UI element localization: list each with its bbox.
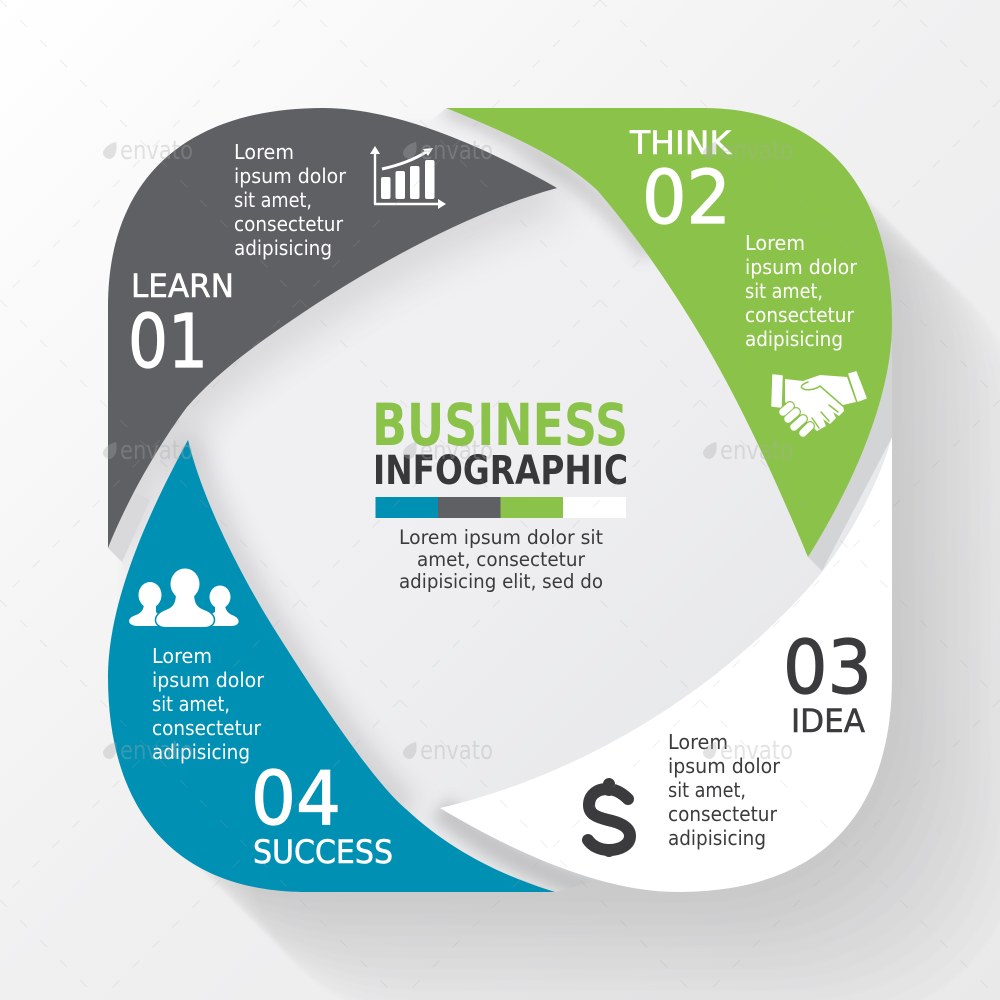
body text: think: consectetur [745, 303, 855, 327]
panel 02: think [446, 108, 892, 557]
envato watermarks: envato [420, 736, 493, 766]
panel 04: success [108, 440, 555, 892]
envato watermarks: envato [120, 136, 193, 166]
panel shadows [108, 108, 650, 900]
long shadow [119, 119, 1000, 1000]
body text: success: ipsum dolor [152, 668, 265, 692]
center body text: amet, consectetur [417, 548, 586, 571]
central backdrop [108, 108, 892, 892]
body text: success [152, 644, 265, 764]
body text: idea [668, 730, 781, 850]
envato watermarks: envato [720, 136, 793, 166]
center body text: Lorem ipsum dolor sit [399, 526, 603, 549]
cast shadow band: dark tip [108, 490, 150, 562]
body text: learn [234, 140, 347, 260]
body text: think [745, 231, 858, 351]
heading: infographic: INFOGRAPHIC [373, 448, 628, 494]
body text: learn: sit amet, [234, 188, 312, 212]
center body text [399, 526, 603, 593]
icon: dollar sign [588, 784, 630, 851]
body text: idea: sit amet, [668, 778, 746, 802]
icon: people [129, 568, 239, 627]
heading: business: BUSINESS [372, 392, 628, 459]
body text: idea: Lorem [668, 730, 728, 754]
step label: learn: LEARN [131, 267, 234, 305]
center title block [372, 392, 628, 593]
envato watermarks: envato [120, 436, 193, 466]
body text: learn: consectetur [234, 212, 344, 236]
icon: handshake [772, 372, 866, 433]
envato watermarks: envato [420, 136, 493, 166]
envato watermarks [103, 136, 793, 766]
step label: idea: IDEA [791, 702, 865, 740]
body text: idea: consectetur [668, 802, 778, 826]
panel 03: idea [440, 437, 892, 892]
center body text: adipisicing elit, sed do [399, 570, 603, 593]
cast shadow band: green on white [808, 340, 892, 571]
body text: think: Lorem [745, 231, 805, 255]
envato watermarks: envato [720, 736, 793, 766]
envato watermarks: envato [120, 736, 193, 766]
body text: idea: ipsum dolor [668, 754, 781, 778]
step number: 04: 04 [251, 756, 341, 842]
step number: 02: 02 [642, 155, 731, 241]
body text: think: adipisicing [745, 327, 843, 351]
body text: success: adipisicing [152, 740, 250, 764]
step label: success: SUCCESS [253, 833, 393, 871]
icon: bar chart [370, 146, 446, 209]
body text: think: ipsum dolor [745, 255, 858, 279]
body text: learn: Lorem [234, 140, 294, 164]
step number: 03: 03 [783, 625, 872, 711]
step label: think: THINK [629, 124, 732, 162]
body text: success: sit amet, [152, 692, 230, 716]
body text: think: sit amet, [745, 279, 823, 303]
body text: success: Lorem [152, 644, 212, 668]
envato watermarks: envato [720, 436, 793, 466]
body text: success: consectetur [152, 716, 262, 740]
body text: idea: adipisicing [668, 826, 766, 850]
envato watermarks: envato [420, 436, 493, 466]
colour bar [376, 497, 626, 518]
panel 01: learn [108, 108, 557, 548]
step number: 01: 01 [128, 299, 208, 385]
body text: learn: adipisicing [234, 236, 332, 260]
body text: learn: ipsum dolor [234, 164, 347, 188]
